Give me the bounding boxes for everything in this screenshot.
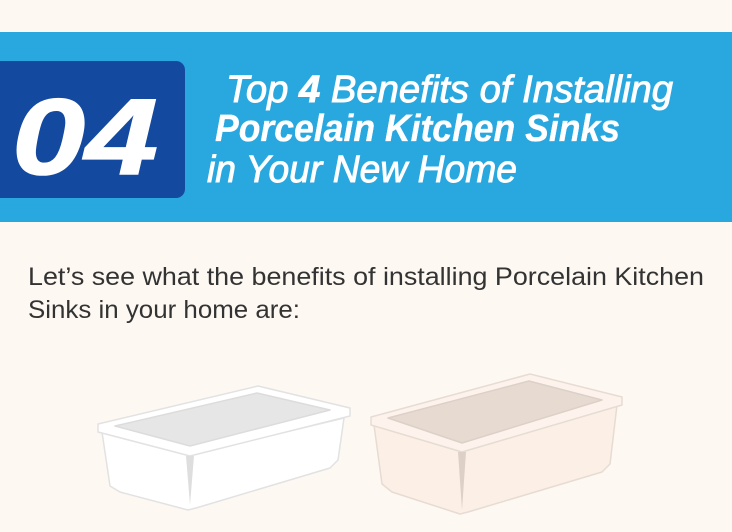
number badge (0, 61, 185, 198)
intro text: Let’s see what the benefits of installing Porcelain Kitchen (28, 263, 704, 291)
white sink (98, 386, 350, 510)
number badge: 04 (12, 76, 158, 197)
header banner (0, 32, 732, 222)
title: Top 4 Benefits of Installing (226, 69, 673, 111)
cream sink (371, 374, 622, 514)
intro text (28, 263, 704, 324)
title: in Your New Home (207, 149, 517, 191)
intro text: Sinks in your home are: (28, 296, 300, 324)
title: Porcelain Kitchen Sinks (215, 108, 620, 150)
title (207, 69, 673, 191)
